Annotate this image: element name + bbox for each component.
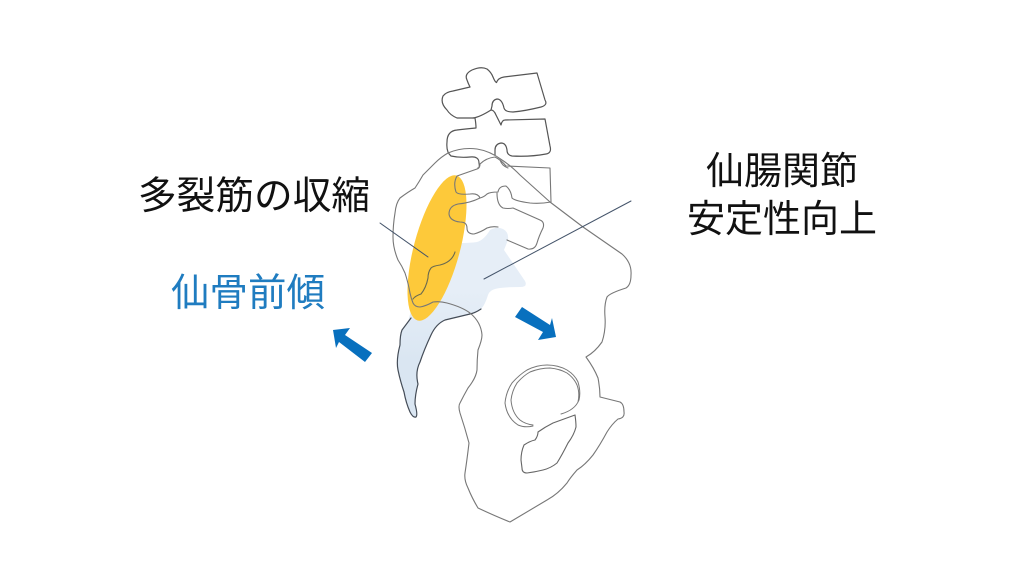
label: sacral anteversion: 仙骨前傾 bbox=[171, 272, 325, 315]
label: multifidus contraction: 多裂筋の収縮 bbox=[138, 175, 370, 218]
multifidus muscle (yellow ellipse) bbox=[395, 170, 479, 326]
lumbar vertebra lower bbox=[447, 110, 550, 168]
lumbar vertebra upper bbox=[442, 68, 546, 118]
label: sacroiliac joint stability: 安定性向上 bbox=[687, 199, 877, 241]
sacrum (light blue fill) bbox=[397, 228, 526, 417]
obturator foramen bbox=[521, 415, 576, 473]
sacrum inner edge bbox=[413, 252, 455, 299]
label: sacroiliac joint stability: 仙腸関節 bbox=[706, 151, 858, 193]
arrow: sacrum base moving back bbox=[515, 307, 556, 340]
acetabulum rings bbox=[505, 365, 580, 427]
leader line: multifidus bbox=[380, 223, 428, 257]
arrow: sacrum tilting forward bbox=[333, 328, 372, 362]
label: sacroiliac joint stability bbox=[687, 151, 877, 241]
leader line: sacroiliac joint bbox=[484, 201, 631, 279]
sacrum tail outline bbox=[397, 309, 481, 417]
ilium outline bbox=[393, 148, 631, 522]
fifth lumbar vertebra and sacral segments bbox=[449, 157, 551, 249]
